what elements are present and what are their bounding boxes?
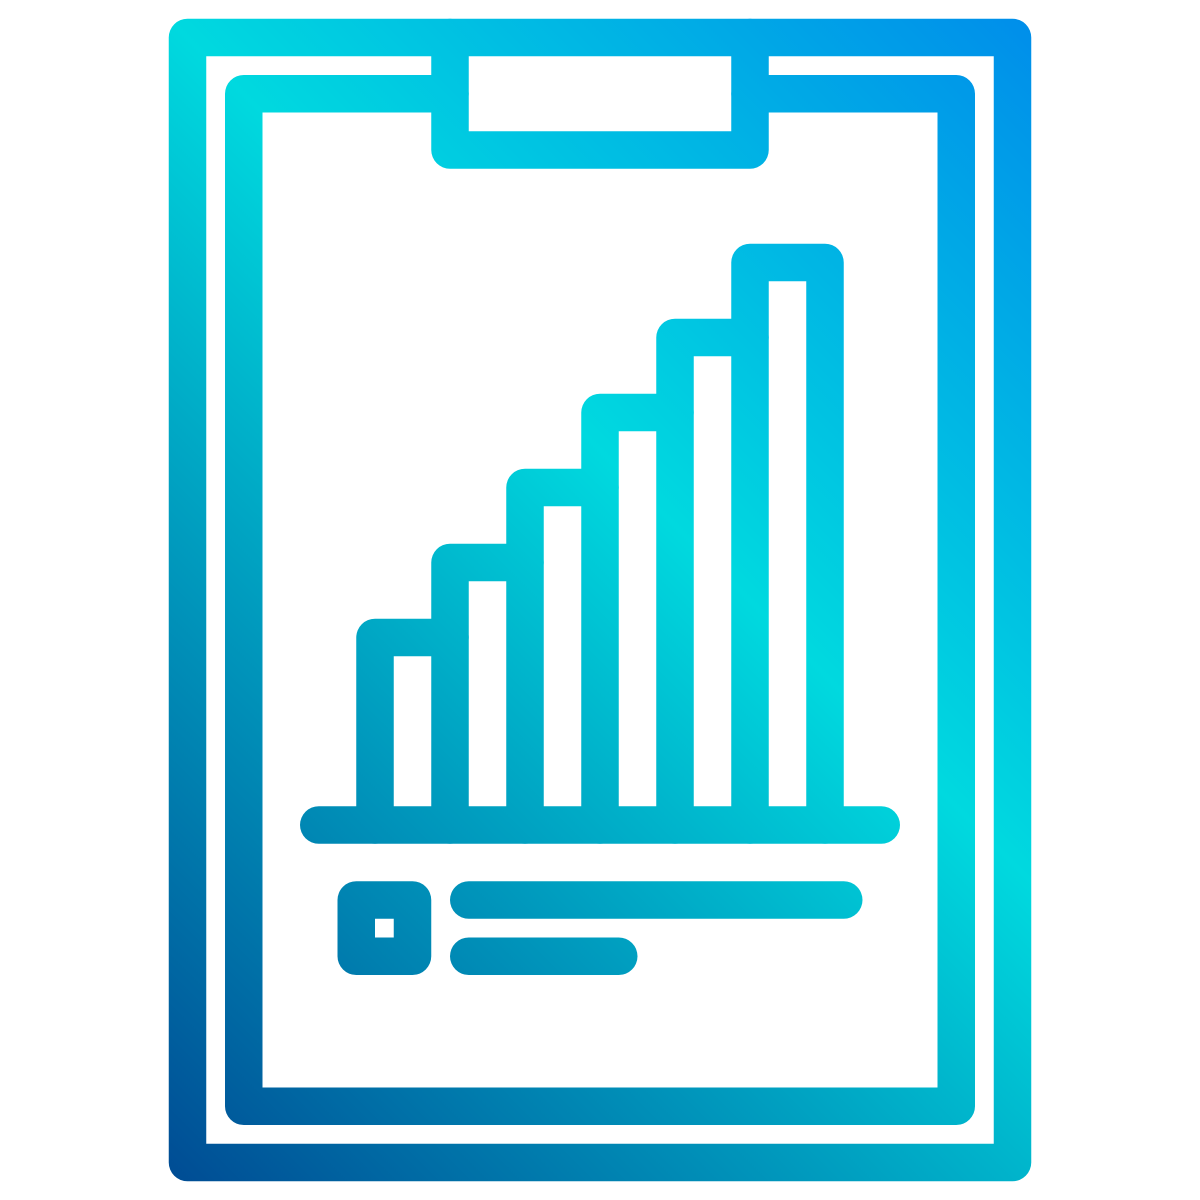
clipboard clip	[450, 38, 750, 150]
legend	[356, 900, 844, 956]
bar 2	[450, 562, 525, 825]
paper sheet outline	[244, 94, 956, 1106]
bar 5	[675, 338, 750, 825]
bar 4	[600, 412, 675, 825]
chart baseline	[319, 806, 881, 844]
legend marker square	[356, 900, 412, 956]
bar 6	[750, 262, 825, 825]
clipboard outer frame	[188, 38, 1012, 1162]
bar 3	[525, 488, 600, 825]
bar chart	[319, 262, 881, 825]
legend long text line	[469, 881, 844, 919]
bar 1	[375, 638, 450, 825]
legend short text line	[469, 938, 619, 975]
